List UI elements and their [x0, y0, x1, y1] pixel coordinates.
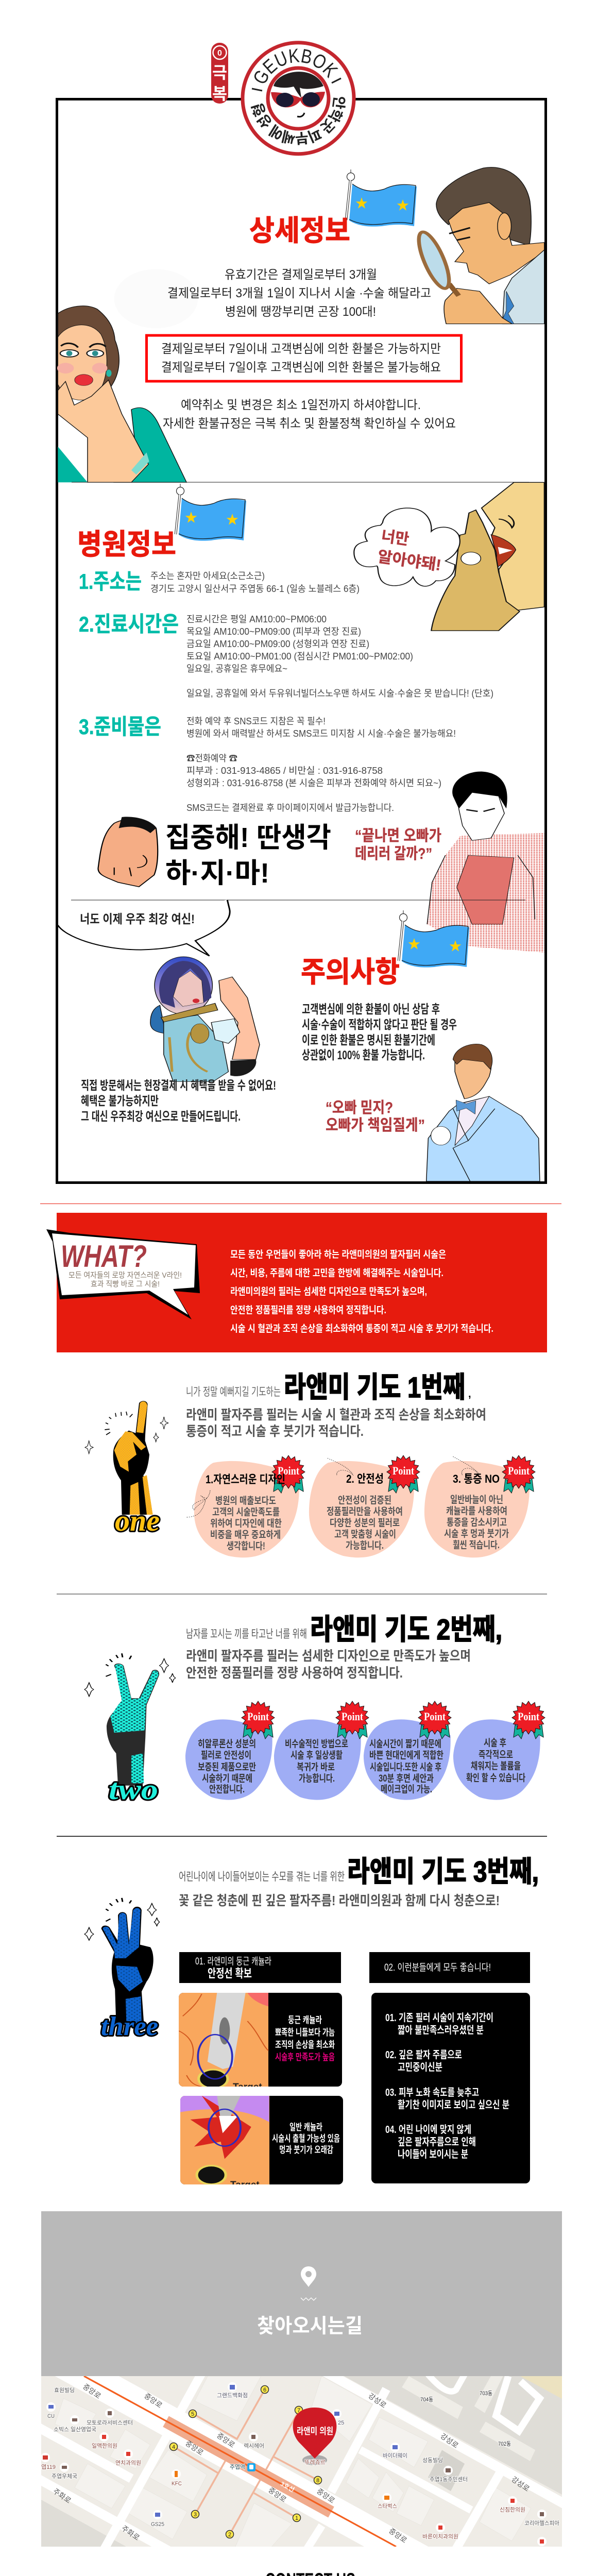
- bubble: no pain: 3. 통증 NO: [453, 1472, 500, 1485]
- heading: 라앤미 기도 2번째: 라앤미 기도 2번째,: [310, 1613, 502, 1646]
- bubble: instant volume: 확인 할 수 있습니다: [466, 1772, 525, 1784]
- bubble: natural design: [186, 1455, 305, 1557]
- card: candidates list: 고민중이신분: [398, 2061, 442, 2073]
- card: candidates list: 01. 기존 필러 시술이 지속기간이: [385, 2012, 493, 2024]
- text: round cannula benefits: 둥근 캐뉼라: [288, 2015, 322, 2025]
- section: opening hours: 금요일 AM10:00~PM09:00 (성형외과 연장 진료): [186, 639, 369, 649]
- caution text: 직접 방문: 혜택은 불가능하지만: [81, 1094, 159, 1108]
- text block: white description: 시술 시 혈관과 조직 손상을 최소화하여 통증이 적고 시술 후 붓기가 적습니다.: [230, 1323, 493, 1334]
- illustration: man with magnifying glass: [413, 167, 544, 324]
- bubble: no pain: Point: [508, 1464, 530, 1477]
- map place labels: 704동: [420, 2397, 433, 2403]
- map place labels: CU: [47, 2413, 55, 2419]
- card: candidates list: 02. 깊은 팔자 주름으로: [385, 2049, 462, 2061]
- icon: index finger hand "one": [85, 1401, 168, 1537]
- road name labels: 중앙로: [143, 2392, 164, 2410]
- bubble: short time: 시술시간이 짧기 때문에: [369, 1738, 441, 1750]
- heading: 상세정보 with flag: [249, 170, 417, 247]
- bubble: short time: 메이크업이 가능.: [381, 1784, 432, 1795]
- card: candidates list: 나이들어 보이시는 분: [398, 2148, 468, 2160]
- quote: 오빠 믿지: “오빠 믿지?: [326, 1099, 393, 1116]
- text block: lead: 통증이 적고 시술 후 붓기가 적습니다.: [186, 1423, 364, 1439]
- logo ring text: [250, 48, 346, 145]
- bubble: natural design: Point: [278, 1464, 300, 1477]
- quote: 끝나면 오빠가: “끝나면 오빠가: [355, 827, 441, 844]
- card: candidates list: 03. 피부 노화 속도를 늦추고: [385, 2087, 479, 2098]
- heading: 병원정보 with flag: [77, 484, 246, 561]
- text: round cannula benefits: 뾰족한 니들보다 가늠: [275, 2027, 335, 2038]
- text block: caution: [302, 1003, 457, 1062]
- heading: 라앤미 기도 3번째: 어린나이에 나이들어보이는 수모를 겪는 너를 위한: [179, 1870, 345, 1883]
- text: normal cannula risks: 시술시 출혈 가능성 있음: [272, 2133, 340, 2144]
- heading: 라앤미 기도 3번째: 라앤미 기도 3번째,: [347, 1855, 539, 1888]
- quote: 끝나면 오빠가: 데리러 갈까?”: [355, 845, 432, 862]
- caution text: 직접 방문: 직접 방문해서는 현장결제 시 혜택을 받을 수 없어요!: [81, 1079, 276, 1093]
- heading: 라앤미 기도 1번째: [186, 1371, 471, 1403]
- callout: refund rule box: [146, 335, 462, 381]
- text block: lead: [186, 1648, 471, 1681]
- road name labels: 중앙로: [184, 2439, 205, 2457]
- text block: caution: 시술·수술이 적합하지 않다고 판단 될 경우: [302, 1018, 457, 1032]
- bubble: no pain: 캐뉼라를 사용하여: [446, 1505, 507, 1517]
- bubble: natural design: 생각합니다!: [227, 1540, 265, 1552]
- heading: 라앤미 기도 3번째: [179, 1855, 539, 1888]
- text block: lead: 꽃 같은 청춘에 핀 깊은 팔자주름! 라앤미의원과 함께 다시 청춘으로!: [179, 1893, 500, 1908]
- bubble: instant volume: 시술 후: [484, 1737, 506, 1749]
- map roads: [41, 2376, 562, 2547]
- subway exit numbers: [170, 2385, 321, 2538]
- bubble: no pain: [424, 1455, 535, 1557]
- section: what to bring: ☎전화예약 ☎: [186, 753, 237, 764]
- bubble: instant volume: 채워지는 볼륨을: [471, 1760, 521, 1772]
- bubble: hyaluronic: 안전합니다.: [209, 1784, 245, 1795]
- map place labels: 코리아헬스피아: [524, 2520, 559, 2527]
- text block: white description: [230, 1249, 493, 1334]
- text: round cannula benefits: 조직의 손상을 최소화: [275, 2040, 335, 2050]
- bubble: non-surgical: 가능합니다.: [299, 1773, 335, 1784]
- map place labels: 효원빌딩: [54, 2387, 75, 2394]
- bubble: natural design: 고객의 시술만족도를: [212, 1506, 280, 1518]
- callout: 집중해 딴생각 하지마: 하·지·마!: [165, 858, 269, 889]
- illustration: astronaut woman: [150, 957, 260, 1081]
- bubble: hyaluronic: 필러로 안전성이: [201, 1750, 251, 1761]
- header bar: round cannula: [179, 1952, 341, 1983]
- card: candidates list: 짧아 불만족스러우셨던 분: [398, 2024, 484, 2036]
- text block: cancellation: [163, 398, 456, 431]
- icon: three fingers hand "three": three: [101, 2012, 158, 2041]
- speech bubble: 너만 알아야돼: 너만: [380, 528, 410, 548]
- road name labels: 주화로: [52, 2487, 73, 2505]
- bubble: no pain: 통증을 감소시키고: [447, 1517, 507, 1528]
- bubble: short time: 시술입니다.또한 시술 후: [370, 1761, 441, 1773]
- heading: 주의사항 with flag: 주의사항: [301, 956, 400, 988]
- bubble: hyaluronic: 보증된 제품으로만: [198, 1761, 256, 1773]
- logo: GEUKBOK badge: [211, 41, 355, 156]
- bubble: non-surgical: 비수술적인 방법으로: [285, 1738, 348, 1750]
- road name labels: 중앙로: [81, 2382, 103, 2400]
- map place labels: 연치과의원: [115, 2460, 141, 2466]
- heading: 라앤미 기도 2번째: 남자를 꼬시는 끼를 타고난 너를 위해: [186, 1628, 307, 1640]
- card: candidates list: 활기찬 이미지로 보이고 싶으신 분: [398, 2099, 509, 2111]
- section: prayer two: [84, 1613, 545, 1806]
- icon: index finger hand "one": one: [115, 1504, 160, 1537]
- bubble: hyaluronic: [185, 1701, 275, 1800]
- section: what to bring: 성형외과 : 031-916-8758 (본 시술은 피부과 전화예약 하시면 되요~): [186, 778, 441, 788]
- section: opening hours: 2.진료시간은: [79, 612, 179, 636]
- road name labels: 중앙로: [387, 2527, 408, 2545]
- bubble: non-surgical: [274, 1701, 369, 1800]
- bubble: safety: [309, 1455, 420, 1557]
- callout: refund rule box: 결제일로부터 7일이내 고객변심에 의한 환불은 가능하지만: [161, 342, 441, 356]
- text: normal cannula risks: 일반 캐뉼라: [289, 2122, 322, 2132]
- speech bubble: 너도 이제: 너도 이제 우주 최강 여신!: [80, 912, 195, 926]
- caution text: 직접 방문: 그 대신 우주최강 여신으로 만들어드립니다.: [81, 1110, 241, 1124]
- map place labels: 702동: [498, 2441, 511, 2447]
- image: round cannula diagram: Target: [233, 2082, 262, 2093]
- road name labels: 주화로: [120, 2524, 141, 2542]
- section: what to bring: 3.준비물은: [79, 715, 161, 739]
- logo pill: 0: [217, 49, 222, 58]
- card: candidates list: 04. 어린 나이에 맞지 않게: [385, 2124, 471, 2136]
- logo pill: [211, 43, 228, 104]
- map place labels: 신침한의원: [500, 2506, 525, 2513]
- section: prayer one: [85, 1371, 535, 1557]
- map place labels: 렉시헤어: [244, 2443, 264, 2449]
- map pin: 라앤미 의원: [293, 2408, 336, 2466]
- subway line 3: 3호선: [279, 2480, 296, 2494]
- bubble: no pain: 시술 후 멍과 붓기가: [444, 1528, 509, 1539]
- map place labels: 주엽역: [230, 2464, 245, 2470]
- card: round cannula: [179, 1993, 342, 2093]
- section: what to bring: SMS코드는 결제완료 후 마이페이지에서 발급가능합니다.: [186, 803, 394, 813]
- illustration: pop-art man with halftone: [427, 772, 544, 953]
- quote: 오빠 믿지: [326, 1099, 425, 1134]
- speech bubble: 너도 이제: [58, 900, 230, 956]
- text block: caution: 고객변심에 의한 환불이 아닌 상담 후: [302, 1003, 440, 1016]
- bubble: instant volume: [453, 1701, 545, 1800]
- subway exit numbers: 5: [191, 2411, 194, 2417]
- road name labels: 강성로: [439, 2432, 460, 2450]
- illustration: pointing fist: [98, 817, 158, 887]
- map place labels: KFC: [172, 2481, 182, 2487]
- logo ring text: GEUKBOK: [254, 48, 338, 83]
- bubble: short time: 바쁜 현대인에게 적합한: [369, 1750, 444, 1761]
- subway exit numbers: 1: [295, 2515, 298, 2521]
- road name labels: 강성로: [510, 2475, 531, 2493]
- text: round cannula benefits: [275, 2015, 335, 2062]
- map pin: 라앤미 의원: 라앤미 의원: [297, 2426, 333, 2436]
- card: candidates list: 깊은 팔자주름으로 인해: [398, 2136, 476, 2148]
- card: normal cannula: [180, 2096, 343, 2191]
- speech bubble: WHAT: [46, 1229, 200, 1319]
- road name labels: 중앙로: [267, 2486, 288, 2504]
- bubble: safety: 다양한 성분의 필러로: [330, 1517, 400, 1529]
- heading: 라앤미 기도 1번째: 니가 정말 예뻐지길 기도하는: [186, 1385, 281, 1398]
- subway exit numbers: 3: [194, 2512, 197, 2518]
- section: address: 1.주소는: [79, 569, 142, 594]
- caution text: 직접 방문: [81, 1079, 276, 1124]
- bubble: no pain: 훨씬 적습니다.: [453, 1539, 500, 1551]
- callout: 집중해 딴생각 하지마: 집중해! 딴생각: [165, 822, 331, 853]
- speech bubble: WHAT: WHAT?: [61, 1239, 147, 1274]
- logo ring text: 안학곳 피부쎄에 성형: [250, 97, 346, 145]
- map place labels: 703동: [480, 2391, 492, 2397]
- logo pill: 극: [212, 63, 227, 82]
- text block: validity: [167, 268, 431, 319]
- text block: lead: 안전한 정품필러를 정량 사용하여 정직합니다.: [186, 1665, 403, 1681]
- section: address: 경기도 고양시 일산서구 주엽동 66-1 (일송 노블레스 6층): [150, 584, 360, 594]
- heading: 라앤미 기도 2번째: [186, 1613, 502, 1646]
- heading: 찾아오시는길: 찾아오시는길: [257, 2315, 363, 2337]
- text block: cancellation: 예약취소 및 변경은 최소 1일전까지 하셔야합니다.: [181, 398, 421, 412]
- map pin: 라앤미 의원: 뚜레쥬르: [304, 2459, 326, 2466]
- map place labels: 모토로라서비스센터: [87, 2419, 133, 2426]
- panel: directions header: [41, 2211, 562, 2376]
- speech bubble: 너만 알아야돼: 알아야돼!: [377, 548, 442, 574]
- image: normal cannula diagram: Target: [230, 2180, 260, 2191]
- subway exit numbers: 4: [172, 2444, 175, 2450]
- road name labels: 강성로: [367, 2392, 388, 2410]
- logo pill: 복: [212, 84, 227, 103]
- map place labels: 스타벅스: [378, 2503, 397, 2510]
- map place labels: 바이더웨이: [383, 2452, 407, 2459]
- subway exit numbers: 7: [297, 2408, 300, 2414]
- map place labels: [41, 2387, 559, 2540]
- map place labels: 바른이치과의원: [422, 2533, 458, 2540]
- section: opening hours: 진료시간은 평일 AM10:00~PM06:00: [186, 614, 327, 624]
- map place labels: 일맥한의원: [92, 2442, 117, 2449]
- bubble: instant volume: Point: [518, 1710, 540, 1723]
- map place labels: 그랜드백화점: [217, 2392, 248, 2399]
- map place labels: 성동빌딩: [422, 2457, 443, 2464]
- card: candidates list: [371, 1993, 530, 2183]
- text block: caution: 상관없이 100% 환불 가능합니다.: [302, 1048, 425, 1062]
- map place labels: 주엽우체국: [52, 2473, 77, 2480]
- bubble: short time: Point: [424, 1710, 446, 1723]
- text: normal cannula risks: [272, 2122, 340, 2155]
- bubble: hyaluronic: Point: [247, 1710, 269, 1723]
- bubble: instant volume: 즉각적으로: [479, 1749, 513, 1760]
- bubble: natural design: 비중을 매우 중요하게: [210, 1529, 281, 1540]
- road name labels: [52, 2382, 531, 2545]
- bubble: safety: Point: [393, 1464, 415, 1477]
- bubble: natural design: 1.자연스러운 디자인: [206, 1473, 285, 1486]
- road name labels: 중앙로: [215, 2431, 236, 2449]
- subway exit paths: [174, 2393, 318, 2534]
- heading: 주의사항 with flag: [301, 910, 469, 988]
- icon: victory hand "two": two: [109, 1774, 158, 1806]
- map place labels: 25: [338, 2420, 344, 2426]
- bubble: non-surgical: Point: [342, 1710, 364, 1723]
- bubble: short time: 30분 후면 세안과: [379, 1773, 434, 1784]
- speech bubble: WHAT: 모든 여자들의 로망 자연스러운 V라인!: [69, 1271, 182, 1280]
- subway exit numbers: 8: [316, 2478, 319, 2484]
- text block: white description: 안전한 정품필러를 정량 사용하여 정직합니다.: [230, 1304, 386, 1316]
- section: opening hours: [79, 612, 493, 699]
- map: clinic location: [41, 2376, 562, 2547]
- header bar: recommended for: 02. 이런분들에게 모두 좋습니다!: [384, 1962, 491, 1973]
- header bar: round cannula: 안정선 확보: [208, 1967, 252, 1980]
- map place labels: 소빅스 일산영업국: [54, 2426, 96, 2433]
- icon: victory hand "two": [84, 1653, 176, 1806]
- section: what to bring: 병원에 와서 매력발산 하셔도 SMS코드 미지참 시 시술·수술은 불가능해요!: [186, 728, 456, 739]
- section: what to bring: [79, 715, 456, 813]
- heading: 라앤미 기도 1번째: ,: [468, 1388, 471, 1400]
- section: address: [79, 569, 360, 594]
- section: what to bring: 피부과 : 031-913-4865 / 비만실 : 031-916-8758: [186, 766, 383, 776]
- bubble: natural design: 위하여 디자인에 대한: [210, 1518, 282, 1529]
- text block: white description: 시간, 비용, 주름에 대한 고민을 한방에 해결해주는 시술입니다.: [230, 1267, 444, 1279]
- bubble: safety: 고객 맞춤형 시술이: [334, 1529, 396, 1540]
- header bar: round cannula: 01. 라앤미의 둥근 캐뉼라: [195, 1956, 271, 1967]
- text block: cancellation: 자세한 환불규정은 극복 취소 및 환불정책 확인하실 수 있어요: [163, 417, 456, 431]
- text block: caution: 이로 인한 환불은 명시된 환불기간에: [302, 1033, 435, 1047]
- text block: validity: 결제일로부터 3개월 1일이 지나서 시술 ·수술 해달라고: [167, 286, 431, 300]
- text: round cannula benefits: 시술후 만족도가 높음: [275, 2052, 335, 2062]
- heading: 병원정보 with flag: 병원정보: [77, 528, 176, 561]
- map place labels: GS25: [151, 2521, 164, 2528]
- text block: lead: 라앤미 팔자주름 필러는 시술 시 혈관과 조직 손상을 최소화하여: [186, 1407, 486, 1422]
- road name labels: 중앙로: [315, 2487, 336, 2505]
- callout: 집중해 딴생각 하지마: [165, 822, 331, 889]
- image: round cannula diagram: [179, 1993, 268, 2093]
- bubble: non-surgical: 복귀가 바로: [297, 1761, 335, 1773]
- text block: lead: [186, 1407, 486, 1439]
- bubble: safety: 안전성이 검증된: [338, 1495, 391, 1506]
- bubble: no pain: 일반바늘이 아닌: [450, 1494, 503, 1505]
- icon: three fingers hand "three": [84, 1898, 160, 2041]
- image: normal cannula diagram: [180, 2096, 269, 2191]
- text: normal cannula risks: 멍과 붓기가 오래감: [279, 2145, 333, 2155]
- section: address: 주소는 혼자만 아세요(소근소근): [150, 571, 265, 581]
- text block: validity: 병원에 땡깡부리면 곤장 100대!: [225, 305, 376, 319]
- section: opening hours: 목요일 AM10:00~PM09:00 (피부과 연장 진료): [186, 626, 361, 637]
- header bar: recommended for: [369, 1952, 530, 1983]
- text block: white description: 모든 동안 우먼들이 좋아라 하는 라앤미의원의 팔자필러 시술은: [230, 1249, 446, 1260]
- bubble: short time: [364, 1701, 451, 1800]
- section: opening hours: 일요일, 공휴일에 와서 두유워너빌더스노우맨 하셔도 시술·수술은 못 받습니다! (단호): [186, 688, 493, 699]
- bubble: natural design: 병원의 매출보다도: [215, 1495, 276, 1506]
- section: prayer three: [84, 1855, 539, 2191]
- map place labels: 주엽1동주민센터: [430, 2476, 468, 2483]
- bubble: safety: 2. 안전성: [346, 1472, 384, 1485]
- section: opening hours: 일요일, 공휴일은 휴무에요~: [186, 664, 287, 674]
- subway exit numbers: 6: [263, 2387, 266, 2393]
- speech bubble: WHAT: 효과 직빵 바로 그 시술!: [91, 1280, 160, 1289]
- map background layer: [41, 2375, 562, 2547]
- bubble: hyaluronic: 시술하기 때문에: [202, 1773, 252, 1784]
- subway exit numbers: 2: [228, 2532, 231, 2538]
- bubble: hyaluronic: 히알루론산 성분의: [198, 1738, 256, 1750]
- text block: validity: 유효기간은 결제일로부터 3개월: [225, 268, 377, 282]
- section: opening hours: 토요일 AM10:00~PM01:00 (점심시간 PM01:00~PM02:00): [186, 651, 413, 662]
- panel: WHAT red band: [46, 1213, 547, 1352]
- bubble: non-surgical: 시술 후 일상생활: [291, 1750, 343, 1761]
- subway line 3: [84, 2376, 396, 2547]
- illustration: whispering face and hand: [431, 482, 544, 631]
- map place labels: 엽119: [41, 2464, 56, 2470]
- text block: lead: 라앤미 팔자주름 필러는 섬세한 디자인으로 만족도가 높으며: [186, 1648, 471, 1664]
- section: what to bring: 전화 예약 후 SNS코드 지참은 꼭 필수!: [186, 716, 326, 726]
- bubble: safety: 정품필러만을 사용하여: [327, 1506, 403, 1517]
- heading: 상세정보 with flag: 상세정보: [249, 214, 350, 247]
- illustration: surprised woman: [57, 269, 198, 482]
- text block: white description: 라앤미의원의 필러는 섬세한 디자인으로 만족도가 높으며,: [230, 1286, 427, 1297]
- speech bubble: 너만 알아야돼: [354, 508, 460, 586]
- callout: refund rule box: 결제일로부터 7일이후 고객변심에 의한 환불은 불가능해요: [161, 361, 441, 375]
- panel: framed detail information: [56, 41, 547, 1184]
- quote: 끝나면 오빠가: [355, 827, 441, 862]
- bubble: safety: 가능합니다.: [346, 1540, 384, 1551]
- illustration: man in blue suit: [427, 1044, 540, 1181]
- quote: 오빠 믿지: 오빠가 책임질게”: [326, 1117, 425, 1134]
- heading: 라앤미 기도 1번째: 라앤미 기도 1번째: [284, 1371, 465, 1403]
- icon: location pin: [301, 2266, 316, 2287]
- map place markers: [41, 2382, 547, 2546]
